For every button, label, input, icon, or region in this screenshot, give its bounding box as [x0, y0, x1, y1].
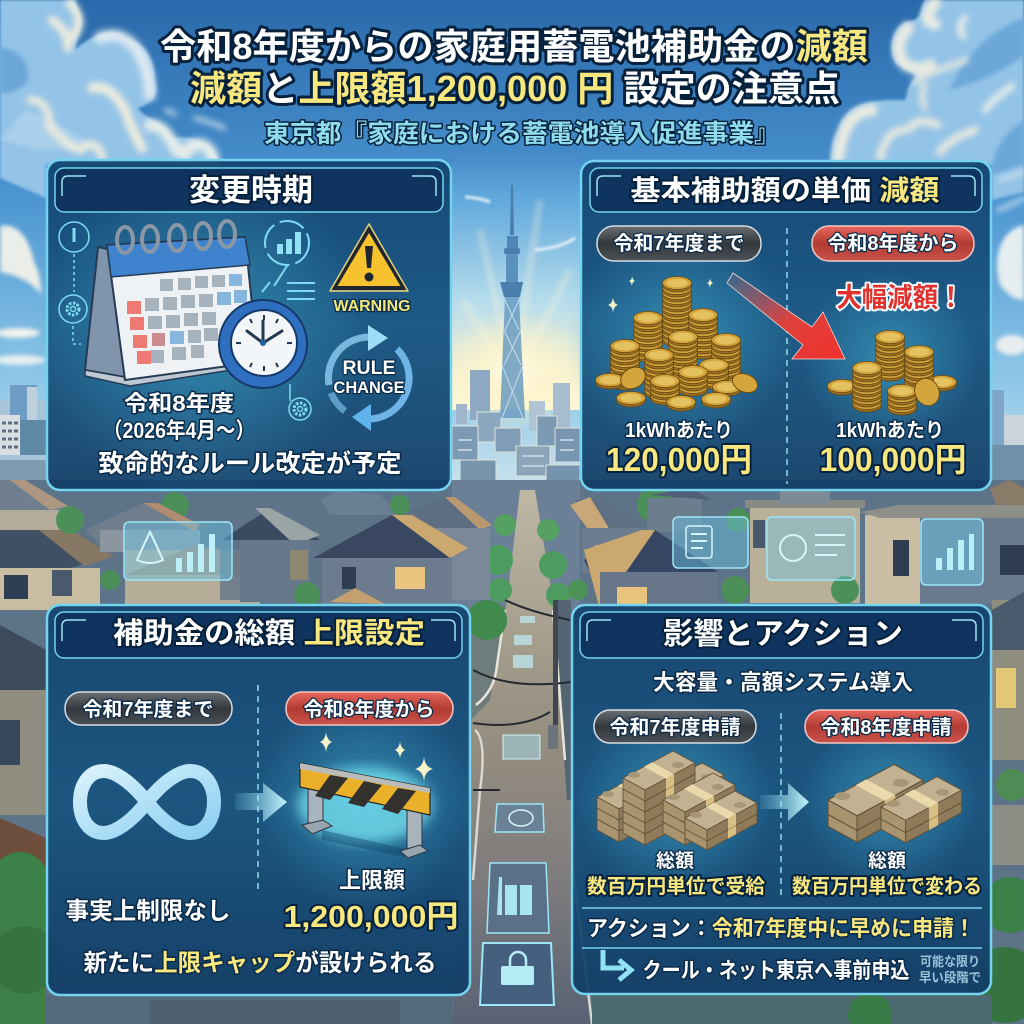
text: no limit: 事実上制限なし [66, 898, 230, 925]
label pill: 令和7年度まで: 令和7年度まで [613, 232, 745, 255]
text: action: アクション：令和7年度中に早めに申請！ [587, 916, 975, 941]
text: old price: 120,000円 [606, 441, 752, 478]
heading: 影響とアクション [580, 612, 983, 658]
text: new price: 1kWhあたり [836, 419, 944, 442]
label pill: 令和8年度から [286, 692, 453, 725]
text: pre-application: クール・ネット東京へ事前申込 [642, 958, 910, 983]
heading: 基本補助額の単価 減額: 基本補助額の単価 減額 [630, 175, 940, 206]
arrow: to cap [235, 783, 287, 822]
text: system heading: 大容量・高額システム導入 [653, 670, 913, 695]
icon: small hologram circles [59, 221, 315, 420]
text: old total: 総額 [656, 850, 694, 872]
text: new total [792, 850, 982, 898]
panel: 基本補助額の単価 減額 [565, 161, 991, 490]
text: small note [919, 954, 981, 985]
label pill: 令和7年度まで: 令和7年度まで [82, 698, 214, 721]
text: old price [606, 419, 752, 478]
text: cap note: 新たに上限キャップが設けられる [84, 949, 436, 977]
text: old price: 1kWhあたり [625, 419, 733, 442]
text: old total [587, 850, 765, 898]
heading: 補助金の総額 上限設定: 補助金の総額 上限設定 [113, 617, 425, 650]
callout: 大幅減額: 大幅減額！ [836, 283, 964, 313]
label pill: 令和8年度から: 令和8年度から [827, 232, 959, 255]
icon: warning triangle [330, 224, 410, 315]
holographic town panels [124, 517, 983, 1005]
arrow: to smaller money [760, 783, 809, 821]
label pill: 令和7年度申請: 令和7年度申請 [609, 716, 741, 739]
label pill: 令和7年度まで [65, 692, 232, 725]
title: 減額と上限額1,200,000 円 設定の注意点 [190, 68, 840, 109]
title [160, 26, 868, 109]
label pill: 令和8年度申請 [805, 710, 968, 743]
text: change date: 致命的なルール改定が予定 [98, 449, 402, 478]
label pill: 令和8年度から [812, 226, 974, 261]
text: change date: （2026年4月～） [103, 418, 255, 443]
label pill: 令和8年度から: 令和8年度から [303, 698, 435, 721]
panel: 補助金の総額 上限設定 [47, 605, 475, 995]
panel: 変更時期 [30, 160, 451, 500]
icon: warning triangle: WARNING [334, 298, 410, 315]
panel: 影響とアクション [572, 605, 991, 994]
icon: small money pile [828, 764, 962, 843]
heading: 補助金の総額 上限設定 [55, 612, 462, 658]
text: new price: 100,000円 [820, 441, 966, 478]
heading: 変更時期 [55, 168, 443, 212]
icon: calendar [85, 221, 258, 386]
heading: 影響とアクション: 影響とアクション [663, 618, 903, 651]
title: 令和8年度からの家庭用蓄電池補助金の減額 [160, 26, 868, 67]
text: small note: 可能な限り [920, 954, 980, 969]
icon: rule change: CHANGE [334, 378, 404, 397]
heading: 変更時期: 変更時期 [189, 173, 313, 208]
text: cap amount: 1,200,000円 [284, 899, 458, 934]
arrow: decrease [727, 273, 845, 359]
label pill: 令和7年度申請 [594, 710, 756, 743]
text: change date [98, 391, 402, 478]
text: old total: 数百万円単位で受給 [587, 875, 765, 898]
icon: large money pile [597, 751, 757, 850]
icon: clock [219, 300, 307, 388]
text: new total: 数百万円単位で変わる [792, 875, 982, 898]
icon: large coin pile [596, 276, 760, 411]
icon: rule change: RULE [342, 358, 396, 379]
label pill: 令和8年度申請: 令和8年度申請 [820, 716, 952, 739]
text: small note: 早い段階で [919, 970, 981, 985]
text: cap amount [284, 868, 458, 934]
heading: 基本補助額の単価 減額 [590, 168, 982, 212]
subtitle: 東京都『家庭における蓄電池導入促進事業』 [264, 120, 780, 148]
text: new total: 総額 [868, 850, 906, 872]
icon: barrier [297, 732, 433, 858]
arrow: action step [603, 950, 631, 980]
text: change date: 令和8年度 [124, 391, 234, 416]
text: cap amount: 上限額 [339, 868, 405, 893]
text: new price [820, 419, 966, 478]
icon: infinity [80, 771, 214, 833]
tokyo skytree tower [500, 185, 525, 418]
icon: rule change [328, 325, 409, 431]
icon: small coin pile [828, 330, 956, 415]
label pill: 令和7年度まで [597, 226, 761, 261]
